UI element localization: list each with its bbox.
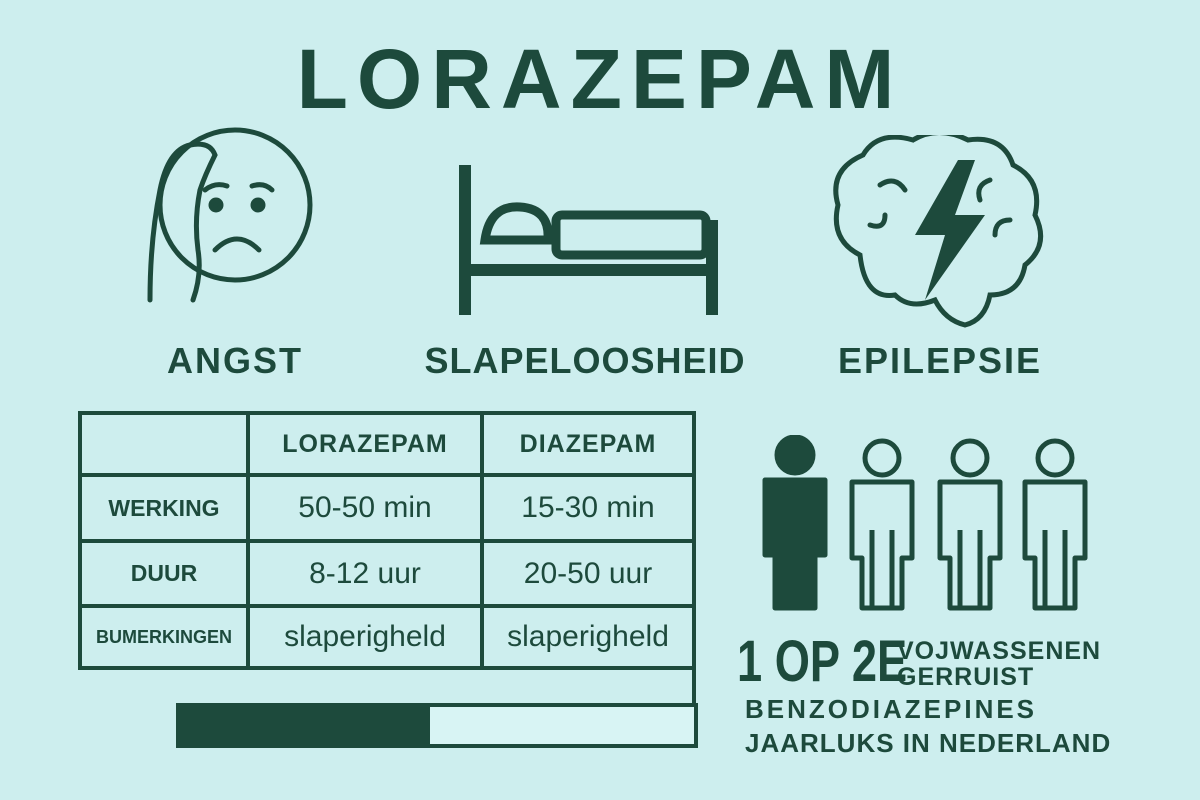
icon: brain with lightning <box>833 135 1044 328</box>
comparison table: WERKING <box>108 494 220 520</box>
comparison table: 20-50 uur <box>524 556 652 590</box>
comparison table: DIAZEPAM <box>520 430 656 458</box>
comparison table: slaperigheld <box>507 620 669 653</box>
comparison table: 15-30 min <box>521 491 655 524</box>
statistic text <box>737 629 1111 758</box>
statistic text: BENZODIAZEPINES <box>745 694 1037 724</box>
label: slapeloosheid: SLAPELOOSHEID <box>424 340 746 381</box>
comparison table: LORAZEPAM <box>282 430 448 458</box>
title: LORAZEPAM <box>297 32 903 126</box>
statistic text: 1 OP 2E <box>737 629 907 694</box>
comparison table: 8-12 uur <box>309 556 421 590</box>
comparison table: slaperigheld <box>284 620 446 653</box>
statistic text: VOJWASSENEN <box>897 637 1101 665</box>
comparison table: 50-50 min <box>298 491 432 524</box>
label: epilepsie: EPILEPSIE <box>838 340 1042 381</box>
label: angst: ANGST <box>167 340 303 381</box>
icon: bed <box>459 165 718 315</box>
statistic text: GERRUIST <box>897 663 1034 691</box>
icon: worried face <box>148 128 312 302</box>
people pictogram <box>762 435 1088 610</box>
progress bar <box>176 703 698 748</box>
comparison table: DUUR <box>131 560 197 586</box>
comparison table: BUMERKINGEN <box>96 626 232 646</box>
comparison table <box>78 411 698 748</box>
statistic text: JAARLUKS IN NEDERLAND <box>745 728 1111 758</box>
